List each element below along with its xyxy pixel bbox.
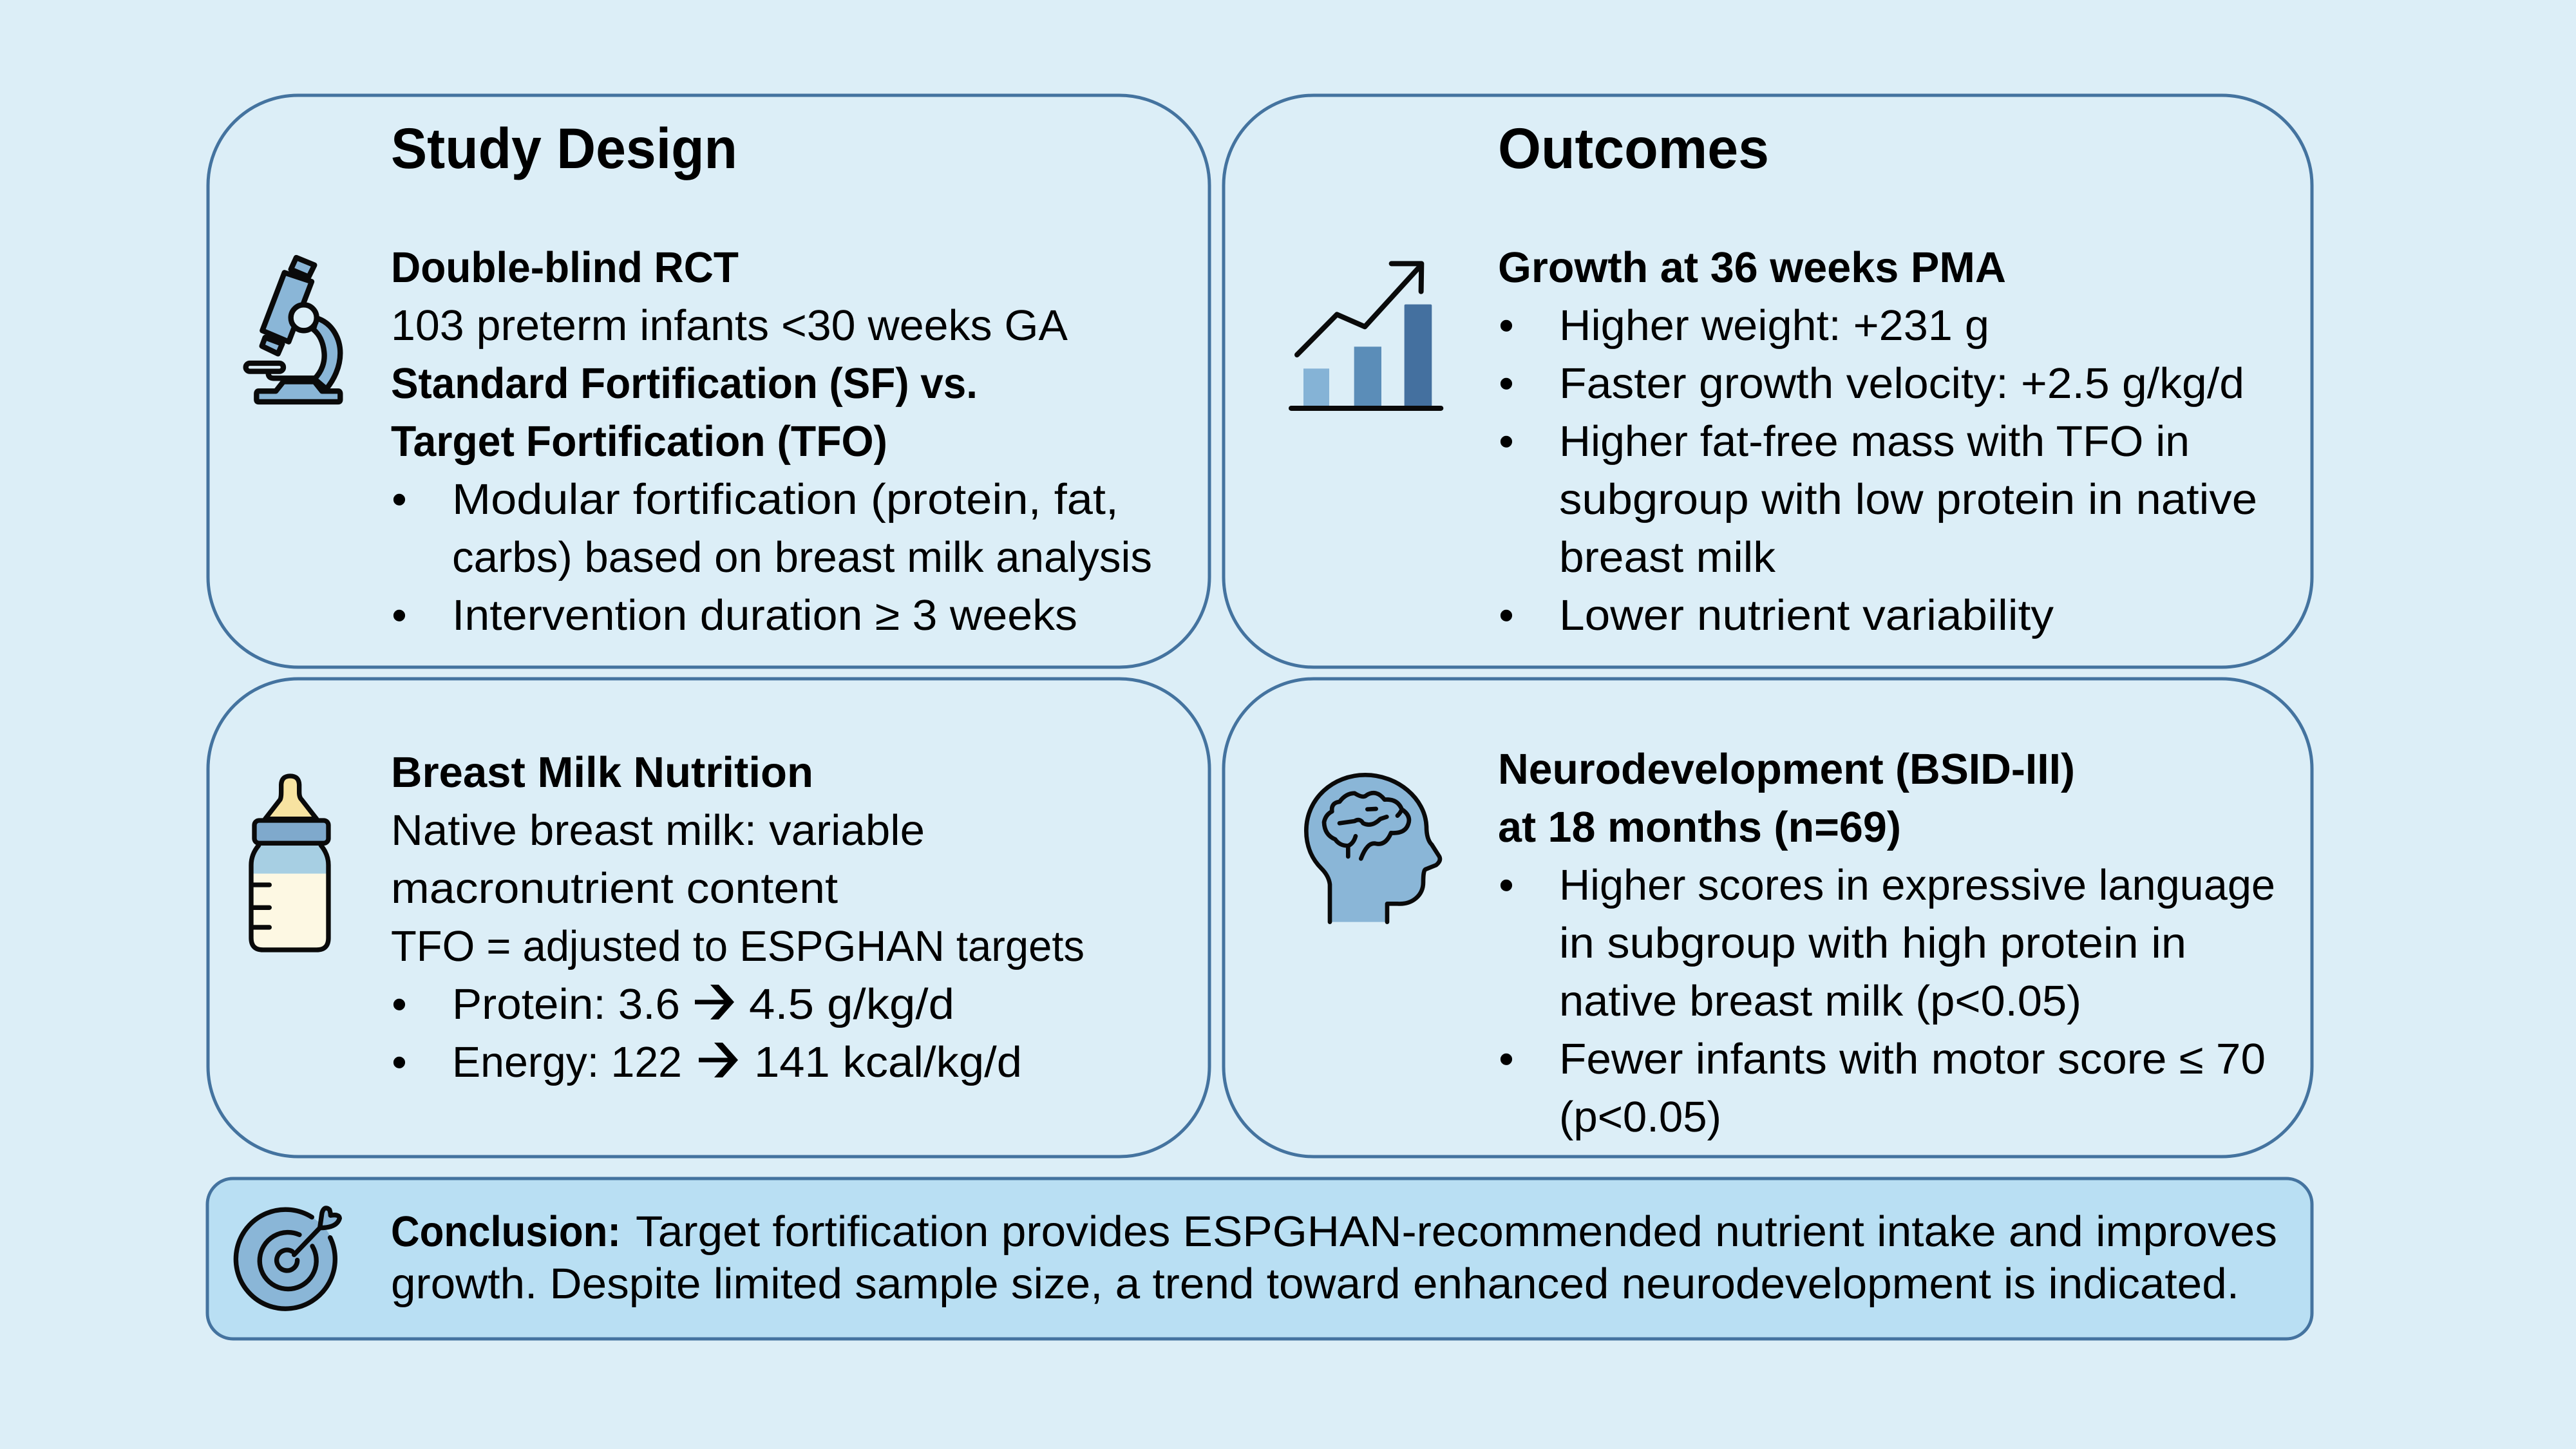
text block: study design details: • xyxy=(392,475,407,524)
text block: neurodevelopment outcomes: Neurodevelopment (BSID-III) xyxy=(1498,745,2075,793)
text block: breast milk nutrition: • xyxy=(392,980,407,1028)
text block: conclusion: growth. Despite limited sample size, a trend toward enhanced neurodevelopment is indicated. xyxy=(391,1260,2239,1308)
text block: growth outcomes: Growth at 36 weeks PMA xyxy=(1498,243,2006,292)
icon: head with brain xyxy=(1306,775,1440,922)
arrow: protein increase xyxy=(695,985,734,1019)
text block: neurodevelopment outcomes: • xyxy=(1499,861,1514,909)
text block: neurodevelopment outcomes: Higher scores in expressive language xyxy=(1559,861,2275,909)
arrow: energy increase xyxy=(699,1043,738,1077)
icon: baby bottle xyxy=(251,776,328,950)
text block: growth outcomes: • xyxy=(1499,417,1514,466)
text block: neurodevelopment outcomes: (p<0.05) xyxy=(1559,1093,1721,1141)
text block: conclusion: Target fortification provides ESPGHAN-recommended nutrient intake and improves xyxy=(636,1208,2277,1256)
text block: neurodevelopment outcomes: at 18 months (n=69) xyxy=(1498,803,1901,851)
panel: neurodevelopment xyxy=(1224,679,2312,1157)
text block: growth outcomes: breast milk xyxy=(1559,533,1776,582)
text block: study design details: 103 preterm infants <30 weeks GA xyxy=(391,301,1068,350)
text block: breast milk nutrition: Breast Milk Nutrition xyxy=(391,748,813,797)
text block: neurodevelopment outcomes: native breast milk (p<0.05) xyxy=(1559,977,2081,1025)
icon: growth chart xyxy=(1291,263,1441,408)
text block: breast milk nutrition: macronutrient content xyxy=(391,864,838,913)
text block: neurodevelopment outcomes xyxy=(1498,745,2275,1141)
panel: breast milk nutrition xyxy=(208,679,1209,1157)
text block: breast milk nutrition: • xyxy=(392,1038,407,1086)
text block: study design details: Intervention duration ≥ 3 weeks xyxy=(452,591,1077,639)
text block: study design details xyxy=(391,243,1152,639)
text block: breast milk nutrition: 4.5 g/kg/d xyxy=(749,980,954,1028)
text block: growth outcomes: • xyxy=(1499,359,1514,408)
text block: study design details: Double-blind RCT xyxy=(391,243,739,292)
text block: growth outcomes xyxy=(1498,243,2257,639)
text block: breast milk nutrition xyxy=(391,748,1084,1086)
text block: growth outcomes: Higher weight: +231 g xyxy=(1559,301,1989,350)
text block: growth outcomes: Lower nutrient variability xyxy=(1559,591,2054,639)
text block: breast milk nutrition: Native breast milk: variable xyxy=(391,806,925,855)
text block: breast milk nutrition: TFO = adjusted to ESPGHAN targets xyxy=(391,922,1084,971)
text block: neurodevelopment outcomes: Fewer infants with motor score ≤ 70 xyxy=(1559,1035,2266,1083)
text block: neurodevelopment outcomes: • xyxy=(1499,1035,1514,1083)
text block: study design details: Target Fortification (TFO) xyxy=(391,417,887,466)
text block: breast milk nutrition: 141 kcal/kg/d xyxy=(754,1038,1022,1086)
text block: breast milk nutrition: Energy: 122 xyxy=(452,1038,682,1086)
text block: breast milk nutrition: Protein: 3.6 xyxy=(452,980,680,1028)
text block: growth outcomes: subgroup with low protein in native xyxy=(1559,475,2257,524)
panel: study design xyxy=(208,95,1209,667)
icon: microscope xyxy=(246,258,340,402)
text block: study design details: • xyxy=(392,591,407,639)
text block: growth outcomes: Higher fat-free mass with TFO in xyxy=(1559,417,2190,466)
heading: study design: Study Design xyxy=(391,116,737,180)
text block: study design details: Standard Fortification (SF) vs. xyxy=(391,359,978,408)
text block: conclusion: Conclusion: xyxy=(391,1208,621,1256)
panel: conclusion xyxy=(207,1179,2312,1339)
heading: outcomes: Outcomes xyxy=(1498,116,1769,180)
text block: neurodevelopment outcomes: in subgroup with high protein in xyxy=(1559,919,2186,967)
text block: study design details: Modular fortification (protein, fat, xyxy=(452,475,1119,524)
text block: growth outcomes: • xyxy=(1499,591,1514,639)
text block: study design details: carbs) based on breast milk analysis xyxy=(452,533,1152,582)
icon: target with arrow xyxy=(236,1208,339,1310)
text block: growth outcomes: Faster growth velocity: +2.5 g/kg/d xyxy=(1559,359,2244,408)
text block: growth outcomes: • xyxy=(1499,301,1514,350)
panel: outcomes xyxy=(1224,95,2312,667)
text block: conclusion xyxy=(391,1208,2277,1308)
